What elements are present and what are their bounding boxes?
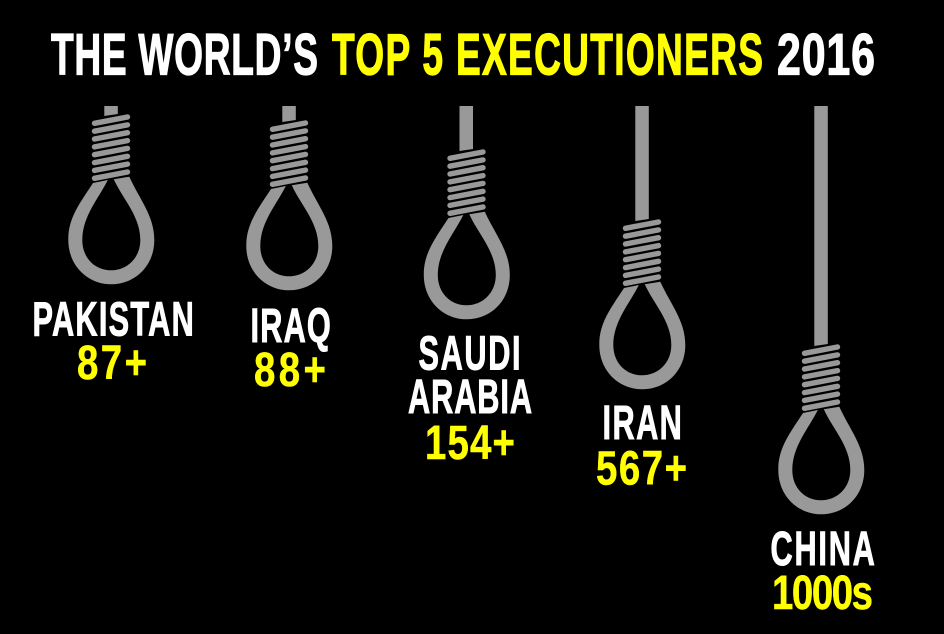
label: Iran 567+: IRAN [602,396,682,450]
noose: Iraq [246,106,332,290]
label: Iran 567+: 567+ [596,443,687,496]
label: Pakistan 87+ [32,293,194,390]
label: Pakistan 87+: 87+ [77,337,147,390]
label: China 1000s: 1000s [772,567,873,620]
title: 2016 [777,22,875,87]
label: China 1000s [770,522,875,620]
noose: Iran [599,106,685,389]
label: China 1000s: CHINA [770,522,875,576]
title: TOP 5 EXECUTIONERS [332,23,763,88]
title: THE WORLD’S [51,23,318,88]
label: Iraq 88+: IRAQ [250,299,331,353]
noose: China [778,106,864,514]
label: Iran 567+ [596,396,687,496]
noose: Pakistan [68,106,154,284]
label: Saudi Arabia 154+: ARABIA [408,370,532,424]
noose: Saudi Arabia [424,106,510,319]
label: Pakistan 87+: PAKISTAN [32,293,194,346]
label: Iraq 88+ [250,299,331,397]
label: Saudi Arabia 154+: SAUDI [418,327,521,380]
label: Iraq 88+: 88+ [254,344,326,397]
title [51,22,875,88]
label: Saudi Arabia 154+ [408,327,532,470]
label: Saudi Arabia 154+: 154+ [425,417,515,470]
